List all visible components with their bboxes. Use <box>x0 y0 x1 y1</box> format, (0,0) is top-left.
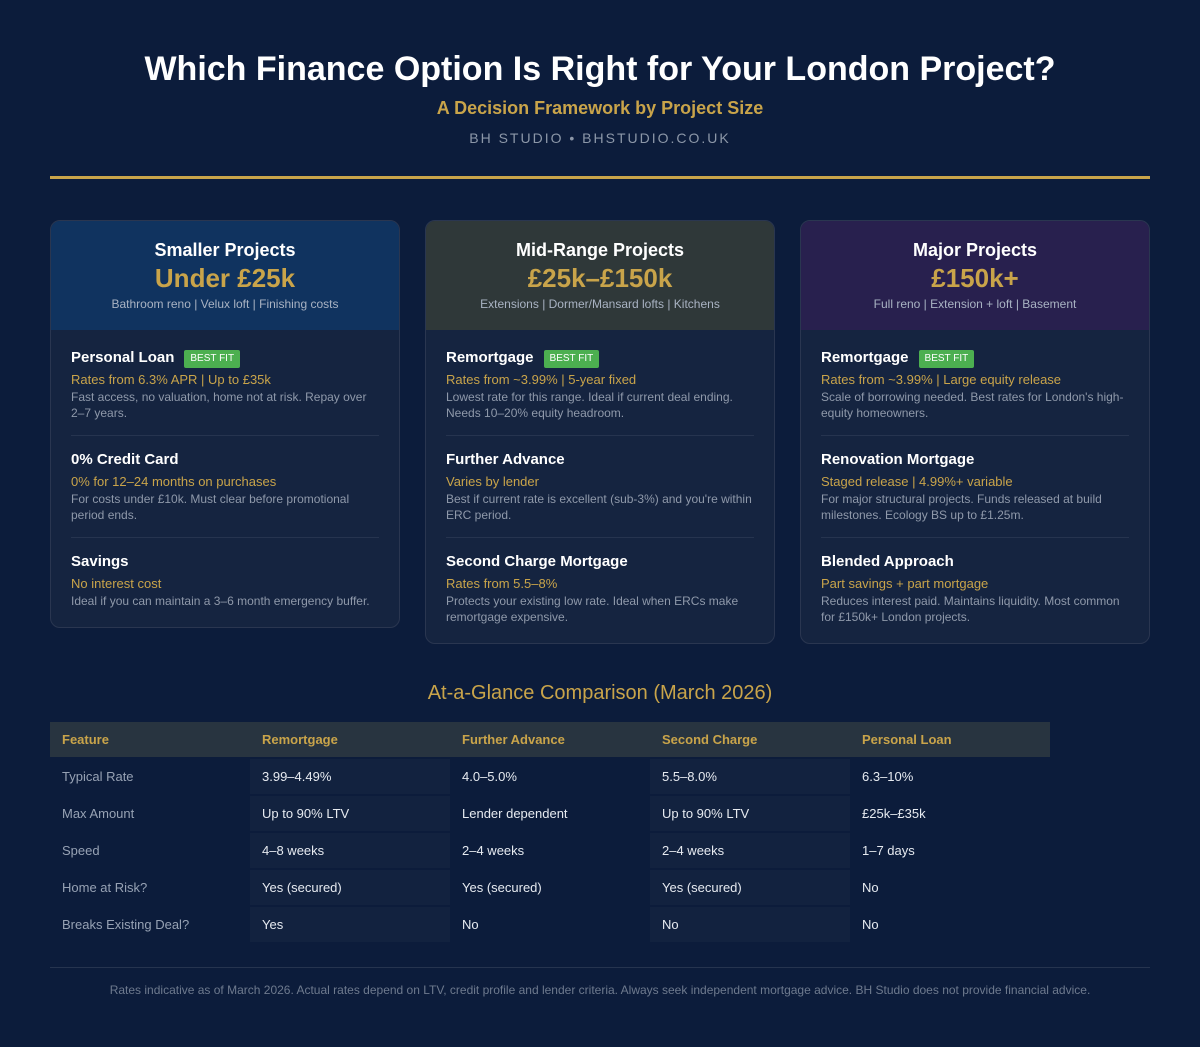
comparison table: 4.0–5.0% <box>462 769 517 784</box>
comparison table <box>50 722 1050 932</box>
option: second charge: Protects your existing low rate. Ideal when ERCs make remortgage expensive. <box>446 594 738 624</box>
option: renovation mortgage: Renovation Mortgage <box>821 451 974 468</box>
option: remortgage major: Scale of borrowing needed. Best rates for London's high-equity homeowners. <box>821 390 1123 420</box>
brand line: BH STUDIO • BHSTUDIO.CO.UK <box>469 130 731 146</box>
comparison table: Speed <box>62 843 100 858</box>
option: blended: Reduces interest paid. Maintains liquidity. Most common for £150k+ London projects. <box>821 594 1120 624</box>
card header: major: £150k+ <box>931 263 1019 293</box>
option: savings: No interest cost <box>71 576 161 591</box>
comparison table: Further Advance <box>462 732 565 747</box>
comparison table: Lender dependent <box>462 806 568 821</box>
comparison table: Max Amount <box>62 806 134 821</box>
comparison table: Yes (secured) <box>262 880 342 895</box>
title: Which Finance Option Is Right for Your London Project? <box>144 50 1056 88</box>
option: credit card: 0% Credit Card <box>71 451 179 468</box>
option: savings <box>71 553 370 608</box>
card header: smaller: Smaller Projects <box>154 240 296 260</box>
comparison table: 5.5–8.0% <box>662 769 717 784</box>
option: personal loan: BEST FIT <box>190 353 234 364</box>
footer disclaimer <box>50 967 1150 997</box>
option: personal loan: Fast access, no valuation, home not at risk. Repay over 2–7 years. <box>71 390 366 420</box>
option: remortgage major: Remortgage <box>821 349 909 366</box>
card header: mid-range <box>426 221 774 330</box>
comparison table: Breaks Existing Deal? <box>62 917 189 932</box>
option: further advance: Further Advance <box>446 451 565 468</box>
card header: mid-range: Mid-Range Projects <box>516 240 684 260</box>
option: credit card: 0% for 12–24 months on purchases <box>71 474 276 489</box>
option: personal loan: Rates from 6.3% APR | Up to £35k <box>71 372 271 387</box>
comparison table: Second Charge <box>662 732 757 747</box>
panel: mid-range projects <box>425 220 775 644</box>
option: blended <box>821 553 1120 624</box>
comparison table: Personal Loan <box>862 732 952 747</box>
option: second charge <box>446 553 738 624</box>
comparison table: 1–7 days <box>862 843 915 858</box>
comparison table: Yes <box>262 917 283 932</box>
option: blended: Part savings + part mortgage <box>821 576 988 591</box>
option: remortgage <box>446 348 754 436</box>
option: remortgage major: Rates from ~3.99% | Large equity release <box>821 372 1061 387</box>
option: personal loan <box>71 348 379 436</box>
option: renovation mortgage: For major structural projects. Funds released at build milestones. Ecology BS up to £1.25m. <box>821 492 1102 522</box>
option: remortgage major <box>821 348 1129 436</box>
card header: smaller: Under £25k <box>155 263 295 293</box>
subtitle: A Decision Framework by Project Size <box>437 98 763 118</box>
option: remortgage: BEST FIT <box>550 353 593 364</box>
card header: mid-range: Extensions | Dormer/Mansard lofts | Kitchens <box>480 297 720 311</box>
option: further advance: Varies by lender <box>446 474 539 489</box>
comparison table: Yes (secured) <box>662 880 742 895</box>
comparison table: Typical Rate <box>62 769 134 784</box>
comparison table: Up to 90% LTV <box>262 806 349 821</box>
comparison table: No <box>862 917 879 932</box>
option: further advance: Best if current rate is excellent (sub-3%) and you're within ERC period. <box>446 492 752 522</box>
comparison table: 2–4 weeks <box>662 843 724 858</box>
card header: mid-range: £25k–£150k <box>528 263 672 293</box>
card header: major: Full reno | Extension + loft | Basement <box>874 297 1076 311</box>
comparison table: Home at Risk? <box>62 880 147 895</box>
comparison table: No <box>862 880 879 895</box>
footer disclaimer: Rates indicative as of March 2026. Actual rates depend on LTV, credit profile and lender criteria. Always seek independent mortgage advice. BH Studio does not provide financial advice. <box>110 983 1090 997</box>
card header: major: Major Projects <box>913 240 1037 260</box>
card header: smaller: Bathroom reno | Velux loft | Finishing costs <box>111 297 338 311</box>
option: credit card: For costs under £10k. Must clear before promotional period ends. <box>71 492 349 522</box>
option: savings: Savings <box>71 553 129 570</box>
comparison table: 3.99–4.49% <box>262 769 331 784</box>
option: second charge: Rates from 5.5–8% <box>446 576 557 591</box>
comparison table: No <box>662 917 679 932</box>
comparison table: Yes (secured) <box>462 880 542 895</box>
comparison table: 6.3–10% <box>862 769 913 784</box>
option: blended: Blended Approach <box>821 553 954 570</box>
option: renovation mortgage <box>821 450 1129 538</box>
option: savings: Ideal if you can maintain a 3–6 month emergency buffer. <box>71 594 370 608</box>
comparison table: No <box>462 917 479 932</box>
option: remortgage: Lowest rate for this range. Ideal if current deal ending. Needs 10–20% equity headroom. <box>446 390 733 420</box>
option: personal loan: Personal Loan <box>71 349 174 366</box>
option: further advance <box>446 450 754 538</box>
comparison table: Up to 90% LTV <box>662 806 749 821</box>
option: credit card <box>71 450 379 538</box>
option: remortgage: Remortgage <box>446 349 534 366</box>
option: renovation mortgage: Staged release | 4.99%+ variable <box>821 474 1013 489</box>
comparison table: 4–8 weeks <box>262 843 324 858</box>
card header: smaller <box>51 221 399 330</box>
table title: At-a-Glance Comparison (March 2026) <box>428 682 772 704</box>
comparison table: £25k–£35k <box>862 806 926 821</box>
comparison table: Remortgage <box>262 732 338 747</box>
option: remortgage major: BEST FIT <box>925 353 968 364</box>
card header: major <box>801 221 1149 330</box>
panel: major projects <box>800 220 1150 644</box>
comparison table: Feature <box>62 732 109 747</box>
option: second charge: Second Charge Mortgage <box>446 553 628 570</box>
panel: smaller projects <box>50 220 400 628</box>
comparison table: 2–4 weeks <box>462 843 524 858</box>
option: remortgage: Rates from ~3.99% | 5-year fixed <box>446 372 636 387</box>
